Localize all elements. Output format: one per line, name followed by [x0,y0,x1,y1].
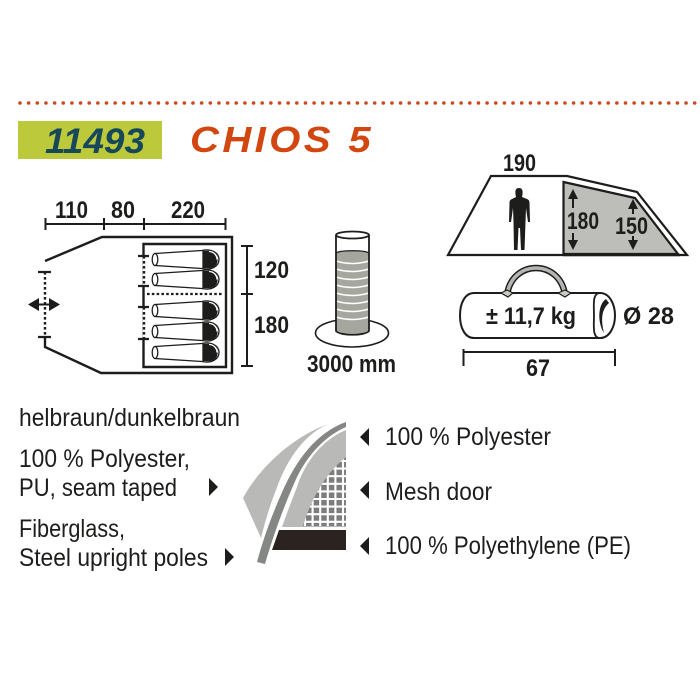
floor plan [28,197,289,373]
floor text: 100 % Polyethylene (PE) [385,532,631,560]
side view of tent [448,150,687,255]
side view of tent: 190 [503,150,536,177]
depth dimensions: 120 [254,257,289,284]
depth dimensions [241,246,289,366]
inner tent [144,244,226,367]
width dimensions: 220 [171,197,205,224]
waterproof rating: 3000 mm [307,351,396,378]
handle [507,268,565,295]
arrow: outer fabric [360,428,369,446]
water column icon [316,232,388,347]
tent material cross-section [243,422,346,564]
height labels and arrows [567,189,648,250]
width dimensions: 80 [111,197,135,224]
entrance door [28,272,60,337]
title: CHIOS 5 [190,119,374,160]
person silhouette [509,188,530,250]
height labels and arrows: 180 [567,208,599,235]
outer fabric text: 100 % Polyester [385,423,551,451]
inner doors and divider [138,256,223,339]
sleeping bags [152,250,219,362]
diameter: Ø 28 [623,303,674,330]
outer tent outline [45,237,232,373]
packed tent bag [460,268,615,338]
bag length: 67 [526,355,550,382]
weight: ± 11,7 kg [486,303,576,330]
poles text: Fiberglass, [19,515,125,543]
tent outline [448,176,687,255]
arrow: floor [360,537,369,555]
poles text [19,515,208,572]
depth dimensions: 180 [254,312,289,339]
flysheet text: PU, seam taped [19,474,177,502]
arrow: mesh [360,481,369,499]
flysheet text: 100 % Polyester, [19,445,190,473]
flysheet text [19,445,190,502]
mesh text: Mesh door [385,478,492,506]
width dimensions: 110 [55,197,88,224]
bag body [460,293,615,338]
bag length [464,349,615,382]
height labels and arrows: 150 [615,213,648,240]
product number badge [18,121,162,161]
arrow: poles [225,548,234,566]
width dimensions [46,197,226,230]
colour text: helbraun/dunkelbraun [19,404,240,432]
arrow: flysheet [209,478,218,496]
poles text: Steel upright poles [19,544,208,572]
inner tent area [564,182,678,254]
product number badge: 11493 [45,122,146,161]
